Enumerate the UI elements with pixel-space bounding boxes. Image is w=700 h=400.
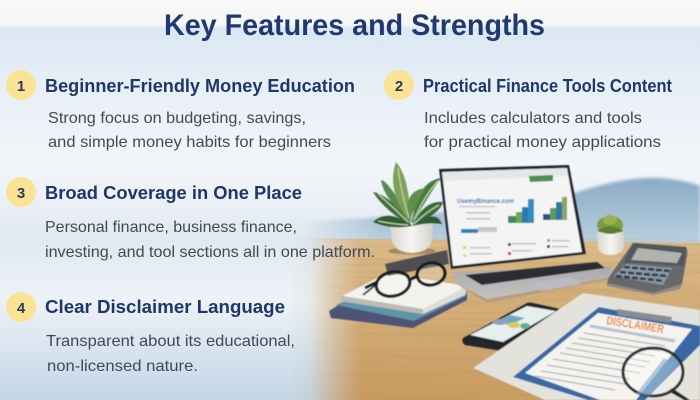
feature 1 [6, 70, 355, 151]
feature 1 description [48, 110, 331, 151]
feature 2 description [424, 110, 661, 151]
mountains [300, 178, 700, 245]
laptop screen: dashboard [442, 168, 582, 266]
disclaimer heading: DISCLAIMER [606, 315, 665, 336]
number badge 4: 4 [17, 300, 26, 317]
document text lines [535, 326, 675, 390]
feature 3 description [45, 219, 375, 261]
number badge 2 [384, 70, 414, 100]
number badge 2: 2 [395, 78, 403, 95]
laptop screen: dashboard: UsemyBinance.com [457, 199, 514, 205]
feature 4 description: Transparent about its educational, [46, 333, 295, 350]
stack of notebooks [329, 273, 467, 328]
feature 1 description: and simple money habits for beginners [48, 134, 331, 151]
feature 3 description: investing, and tool sections all in one platform. [45, 244, 375, 261]
potted plant [373, 162, 443, 254]
small potted plant [597, 215, 624, 255]
feature 4 description: non-licensed nature. [47, 358, 198, 375]
feature 4 heading: Clear Disclaimer Language [45, 296, 285, 317]
feature 2 description: Includes calculators and tools [424, 110, 642, 127]
wooden table [290, 238, 700, 400]
desk scene illustration [329, 162, 700, 400]
feature 3 heading: Broad Coverage in One Place [45, 182, 302, 203]
feature 4 description [46, 333, 295, 375]
feature 3 [6, 177, 375, 261]
feature 1 heading: Beginner-Friendly Money Education [45, 75, 355, 96]
smartphone [462, 302, 562, 352]
disclaimer document on clipboard [473, 293, 700, 400]
feature 3 description: Personal finance, business finance, [45, 219, 297, 236]
dark notebook [385, 250, 449, 276]
feature 4 [6, 292, 295, 375]
number badge 1 [6, 70, 36, 100]
laptop [439, 165, 613, 303]
number badge 3 [6, 177, 36, 207]
number badge 3: 3 [17, 185, 25, 202]
number badge 1: 1 [17, 78, 25, 95]
feature 2 description: for practical money applications [424, 134, 661, 151]
title: Key Features and Strengths [164, 9, 545, 42]
number badge 4 [6, 292, 36, 322]
feature 2 [384, 70, 672, 151]
eyeglasses [365, 261, 447, 299]
feature 1 description: Strong focus on budgeting, savings, [48, 110, 306, 127]
feature 2 heading: Practical Finance Tools Content [423, 75, 672, 96]
magnifying glass [623, 348, 690, 400]
calculator [607, 243, 687, 295]
